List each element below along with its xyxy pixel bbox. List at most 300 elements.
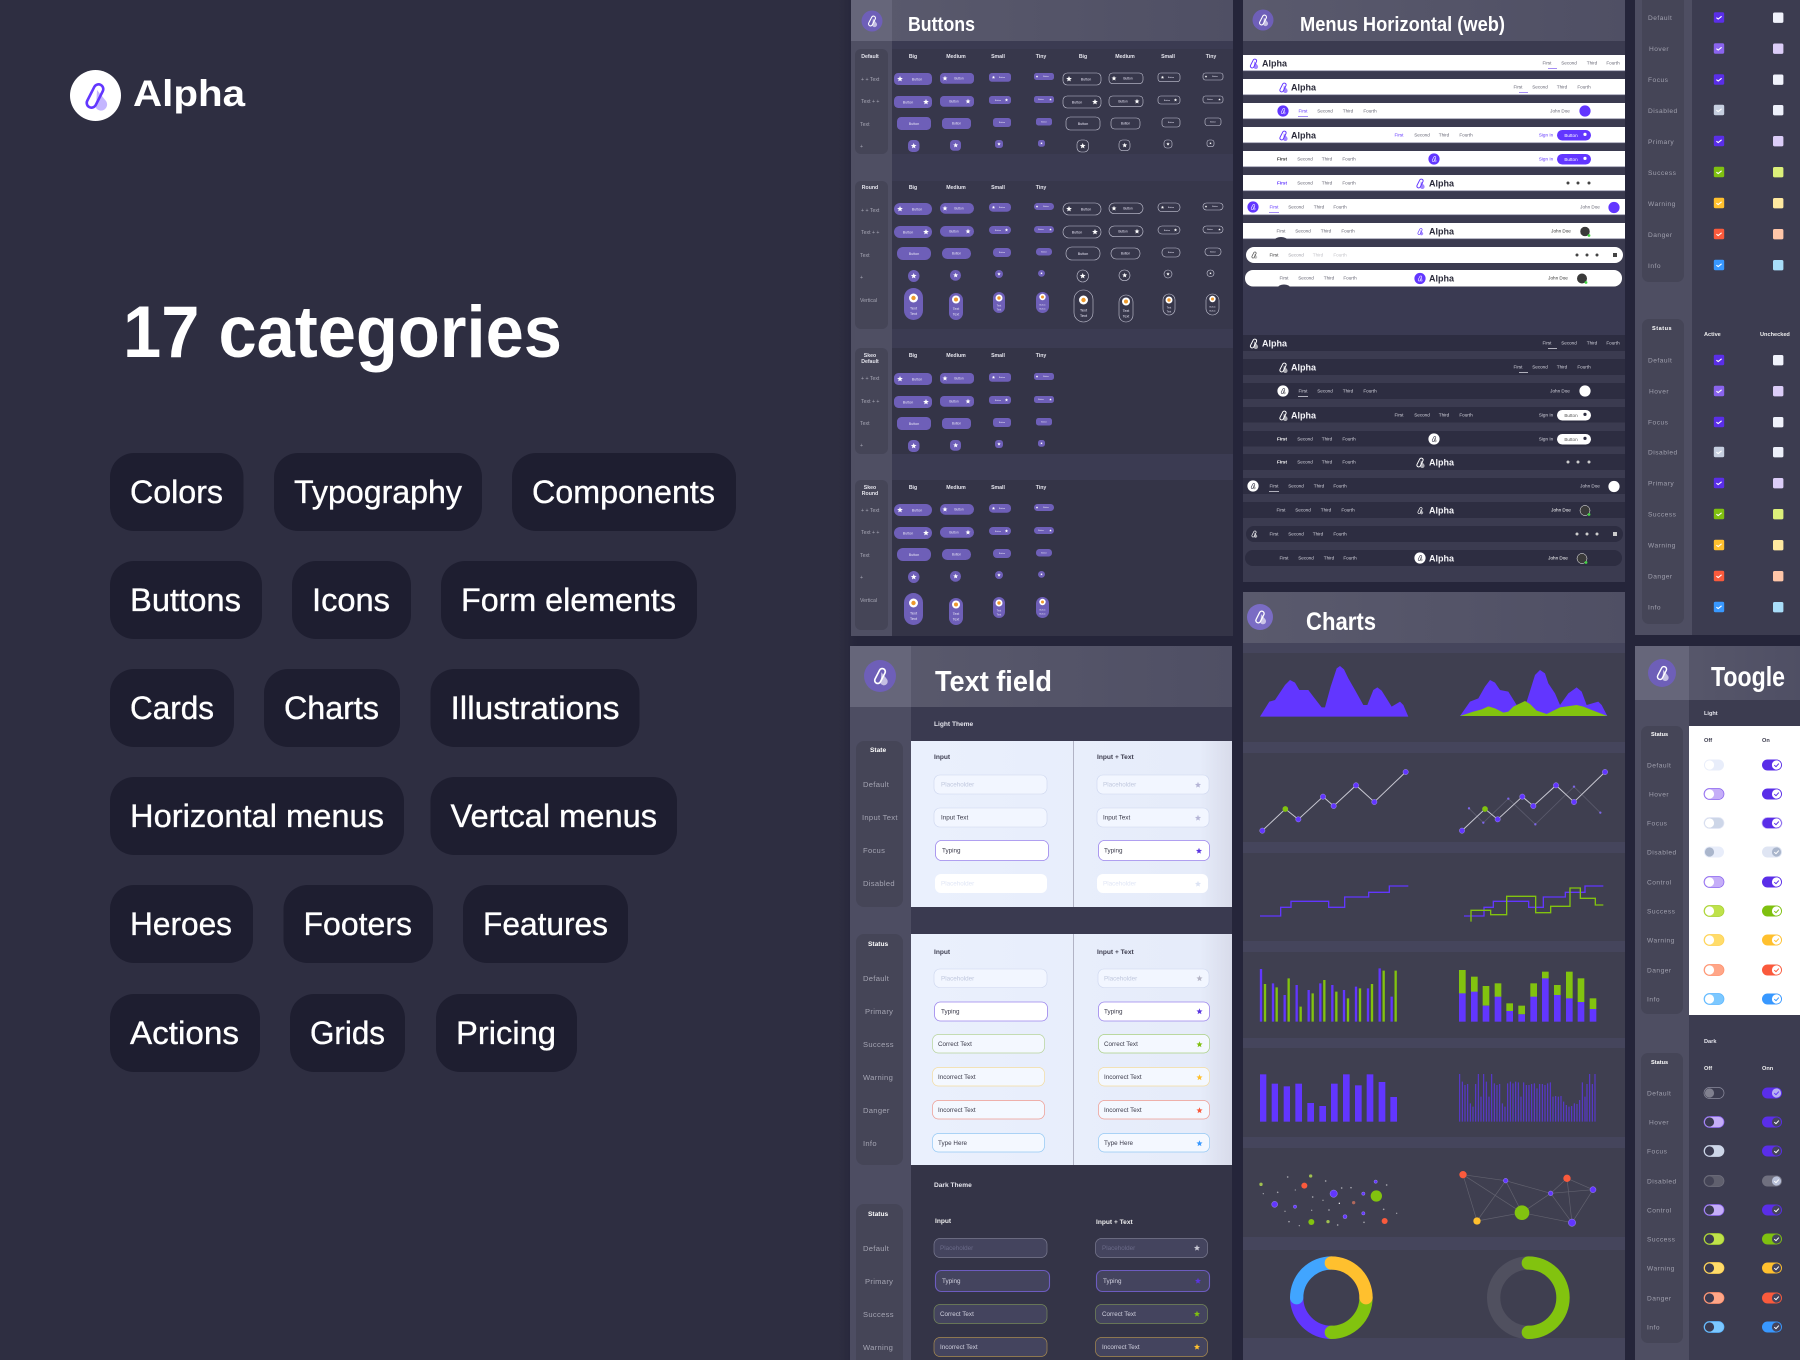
light menu 6: Second (1297, 181, 1313, 186)
light menu 8: Second (1295, 229, 1311, 234)
dark menu 10: Second (1298, 556, 1314, 561)
light form: status: Typing (941, 1008, 960, 1016)
dark form (934, 1218, 1210, 1356)
column headers: Medium (1115, 54, 1135, 60)
chip: Form elements: Form elements (461, 582, 676, 618)
column headers light (1704, 738, 1770, 744)
chip: Grids (290, 994, 405, 1072)
dark menu 6: Fourth (1342, 460, 1356, 465)
light menu 4: First (1395, 133, 1404, 138)
sidebar labels: Focus (863, 846, 885, 855)
dark menu 7: Fourth (1333, 484, 1347, 489)
dark menu 3: John Doe (1550, 389, 1570, 394)
dark menu 10: Third (1324, 556, 1335, 561)
stacked bar chart (1459, 970, 1596, 1022)
light menu 9 (1246, 247, 1623, 263)
white toggle sheet (1689, 726, 1800, 1015)
buttons: default filled: Button (995, 99, 1002, 102)
light menu 4 (1243, 127, 1625, 143)
column headers: Small (991, 185, 1005, 191)
step chart (1260, 886, 1408, 916)
light form: state: Typing (1104, 848, 1123, 854)
sidebar labels (1647, 732, 1677, 1332)
sidebar labels: Disabled (1647, 1178, 1677, 1186)
sidebar labels: Primary (1648, 139, 1674, 146)
chip: Vertcal menus: Vertcal menus (450, 798, 657, 834)
dark menu 1: Alpha (1262, 338, 1288, 349)
light form: status: Type Here (938, 1140, 968, 1147)
panel: buttons (851, 0, 1233, 636)
buttons: round filled (894, 203, 1054, 282)
sidebar labels: Default (863, 780, 890, 789)
column headers: Medium (946, 185, 966, 191)
dark menu 9: First (1270, 532, 1279, 537)
dark menu 8: Third (1321, 508, 1332, 513)
dark menu 8: John Doe (1551, 508, 1571, 513)
dark menu 10: Fourth (1343, 556, 1357, 561)
chip: Buttons: Buttons (130, 582, 241, 618)
column headers: Big (1079, 54, 1087, 60)
category chips (110, 453, 736, 1072)
dark menu 8 (1243, 502, 1625, 518)
sidebar labels: Danger (1647, 1296, 1672, 1302)
dark menu 4: First (1395, 413, 1404, 418)
chip: Vertcal menus (430, 777, 677, 855)
light menu 7: Third (1314, 205, 1325, 210)
sidebar labels: Text + + (861, 399, 879, 405)
sidebar labels: Disabled (1648, 108, 1678, 115)
column headers: Medium (946, 353, 966, 359)
chip: Heroes (110, 885, 253, 963)
sidebar cards (1641, 726, 1683, 1343)
sidebar labels: Text + + (861, 99, 879, 105)
buttons: default filled: Button (912, 78, 922, 82)
brand logo: Alpha (133, 73, 245, 114)
dark menu 6: First (1277, 460, 1287, 465)
sidebar labels: Disabled (1648, 450, 1678, 456)
toggles light off (1704, 760, 1724, 1004)
sidebar labels: Warning (1647, 1266, 1675, 1272)
sidebar labels: Primary (865, 1277, 893, 1286)
sidebar labels: Focus (1647, 1148, 1668, 1156)
light form: status: Input (934, 949, 951, 956)
light menu 4: Fourth (1459, 133, 1473, 138)
dark menu 1: Fourth (1606, 341, 1620, 346)
chip: Typography (274, 453, 482, 531)
light form: status (911, 934, 1232, 1165)
sidebar labels: Info (1648, 604, 1661, 612)
column headers: Tiny (1036, 54, 1046, 60)
column headers: Small (1161, 54, 1175, 60)
panel: charts (1243, 592, 1625, 1360)
light form: status: Incorrect Text (938, 1107, 976, 1114)
sidebar labels: State (870, 747, 886, 754)
sidebar labels: Warning (863, 1343, 893, 1352)
dark menu 4: Second (1414, 413, 1430, 418)
sidebar labels: Round (862, 185, 878, 191)
sidebar labels: Default (1647, 1090, 1671, 1098)
light menu 5: First (1277, 157, 1287, 162)
sidebar labels: Skeo (864, 353, 876, 359)
light menu 2 (1243, 79, 1625, 95)
sidebar labels: Success (863, 1040, 894, 1049)
sidebar labels: Status (868, 941, 888, 948)
donut chart multi-colour (1297, 1263, 1366, 1332)
buttons: round outline (1063, 203, 1223, 282)
toggles light on (1762, 760, 1782, 1004)
light form: status: Placeholder (1104, 976, 1137, 982)
light menu 2: First (1514, 85, 1523, 90)
buttons: default filled: Button (1038, 98, 1044, 101)
light menu 9: Third (1313, 253, 1324, 258)
light menu 1: Alpha (1262, 58, 1288, 69)
light menu 8: John Doe (1551, 229, 1571, 234)
theme label: light: Light Theme (934, 721, 974, 728)
sidebar labels: Success (1648, 170, 1677, 177)
dark menu 9: Second (1288, 532, 1304, 537)
sidebar labels: Danger (1648, 232, 1673, 239)
sidebar labels: Text (860, 421, 870, 427)
light form: state: Placeholder (1103, 782, 1136, 788)
dark menu 1: First (1543, 341, 1552, 346)
buttons: default filled: Button (909, 122, 919, 126)
dark form: Correct Text (940, 1311, 974, 1318)
sidebar labels: Warning (863, 1073, 893, 1082)
light menu 8: Alpha (1429, 226, 1455, 237)
light menu 10 (1245, 270, 1622, 290)
sidebar labels: Text (860, 122, 870, 128)
sidebar labels: Default (861, 359, 879, 365)
dark form: Placeholder (1102, 1245, 1135, 1252)
chip: Illustrations: Illustrations (450, 690, 620, 726)
light menu 2: Fourth (1577, 85, 1591, 90)
sidebar labels: + + Text (861, 376, 880, 382)
dark menu 3: Third (1343, 389, 1354, 394)
buttons: vertical filled: Text (997, 304, 1002, 308)
active checkboxes top (1714, 12, 1724, 270)
sidebar labels (860, 54, 880, 604)
buttons: default filled: Button (1041, 120, 1047, 124)
light menu 9: Second (1288, 253, 1304, 258)
light form: status: Incorrect Text (1104, 1107, 1142, 1114)
light form: status: Input + Text (1097, 949, 1134, 956)
light menu 4: Sign In (1539, 133, 1554, 138)
light menu 3: First (1299, 109, 1308, 114)
area chart (1260, 666, 1408, 717)
light form: status: Incorrect Text (938, 1074, 976, 1081)
sidebar labels: Default (863, 974, 890, 983)
dark form: Incorrect Text (940, 1344, 978, 1351)
unchecked checkboxes bottom (1773, 355, 1783, 612)
sidebar labels: + (860, 275, 863, 281)
dark menu 7 (1243, 478, 1625, 494)
sidebar labels: Info (863, 1139, 877, 1148)
dark menu 8: Alpha (1429, 505, 1455, 516)
light menu 7: John Doe (1580, 205, 1600, 210)
sidebar labels: Vertical (860, 298, 877, 304)
column headers: Tiny (1036, 353, 1046, 359)
panel heading: Toogle (1711, 661, 1785, 692)
light menu 10: Alpha (1429, 273, 1455, 284)
dark menu 2: Third (1557, 365, 1568, 370)
light menu 2: Alpha (1291, 82, 1317, 93)
buttons: vertical filled: Button (1039, 308, 1046, 310)
sidebar labels: + + Text (861, 77, 880, 83)
sidebar labels: Danger (863, 1106, 890, 1115)
theme label: dark: Dark (1704, 1039, 1717, 1045)
light menu 6: Alpha (1429, 178, 1455, 189)
light menu 5: Third (1322, 157, 1333, 162)
light menu 1: Second (1561, 61, 1577, 66)
panel heading: Menus Horizontal (web) (1300, 14, 1505, 36)
sidebar labels: + + Text (861, 508, 880, 514)
chip: Typography: Typography (294, 474, 462, 510)
chip: Heroes: Heroes (130, 906, 232, 942)
chip: Actions (110, 994, 260, 1072)
scatter chart (1259, 1174, 1397, 1226)
toggles dark off (1704, 1088, 1724, 1332)
active checkboxes bottom (1714, 355, 1724, 612)
column headers: Tiny (1036, 185, 1046, 191)
chip: Horizontal menus: Horizontal menus (130, 798, 384, 834)
sidebar labels: + (860, 443, 863, 449)
dark menu 3: First (1299, 389, 1308, 394)
column headers: Medium (946, 54, 966, 60)
chip: Form elements (441, 561, 697, 639)
sidebar labels: Success (863, 1310, 894, 1319)
sidebar labels: Control (1647, 880, 1672, 886)
sidebar labels: Round (862, 491, 878, 497)
sidebar labels: Text (860, 553, 870, 559)
light form: status: Incorrect Text (1104, 1074, 1142, 1081)
dark form: Input (935, 1218, 952, 1225)
light menu 10: Fourth (1343, 276, 1357, 281)
buttons: default filled: Button (952, 122, 961, 126)
light form: status: Correct Text (938, 1041, 972, 1048)
dark menu 5: Sign In (1539, 437, 1554, 442)
light menu 7: First (1270, 205, 1279, 210)
column headers: Small (991, 54, 1005, 60)
buttons: default filled: Button (1043, 75, 1049, 78)
light menu 8 (1243, 223, 1625, 243)
buttons: skeo default (894, 373, 1054, 452)
panel logo (1252, 10, 1274, 30)
light menu 2: Second (1532, 85, 1548, 90)
light menu 10: Third (1324, 276, 1335, 281)
sidebar labels: Info (1647, 996, 1660, 1004)
dark menu 6: Alpha (1429, 457, 1455, 468)
dark menu 4: Button (1564, 413, 1578, 418)
sidebar labels: Focus (1648, 420, 1669, 426)
light menu 6: Fourth (1342, 181, 1356, 186)
dark menu 10: First (1280, 556, 1289, 561)
panel heading: Buttons (908, 14, 975, 36)
sidebar labels (862, 747, 898, 1352)
dark menu 3 (1243, 383, 1625, 399)
light menu 4: Alpha (1291, 130, 1317, 141)
buttons: default filled: Button (949, 100, 959, 104)
panel: toggle (1635, 646, 1800, 1360)
sidebar labels: Status (1652, 326, 1672, 332)
sidebar labels: Default (1648, 358, 1672, 364)
network chart (1459, 1171, 1596, 1226)
column headers: Big (909, 485, 917, 491)
dark menu 2: Alpha (1291, 362, 1317, 373)
buttons: default filled: Button (954, 77, 964, 81)
chip: Footers (284, 885, 433, 963)
dark menu 7: John Doe (1580, 484, 1600, 489)
theme label: light: Light (1704, 711, 1718, 717)
sidebar labels: Status (1651, 1060, 1668, 1066)
dark menu 5: Third (1322, 437, 1333, 442)
sidebar labels: Focus (1647, 820, 1668, 828)
light form: state: Placeholder (941, 782, 974, 788)
sidebar labels: Text + + (861, 230, 879, 236)
buttons: vertical filled: Text (953, 307, 959, 311)
sidebar labels: Warning (1648, 542, 1676, 550)
sidebar labels: Text + + (861, 530, 879, 536)
light form: state (911, 741, 1232, 907)
buttons: default filled: Button (999, 121, 1006, 124)
column headers (909, 54, 1216, 491)
sidebar labels: Info (1648, 263, 1661, 270)
dark menu 8: Second (1295, 508, 1311, 513)
panel: checkboxes (1635, 0, 1800, 635)
buttons: vertical filled: Text (953, 312, 959, 316)
chip: Buttons (110, 561, 262, 639)
light menu 8: Third (1321, 229, 1332, 234)
chip: Features: Features (483, 906, 608, 942)
sidebar labels: Info (1647, 1324, 1660, 1332)
light form: state: Input + Text (1097, 754, 1134, 761)
sidebar labels: Warning (1648, 201, 1676, 208)
light menu 3: John Doe (1550, 109, 1570, 114)
buttons: default filled: Button (903, 100, 913, 104)
column headers: Big (909, 353, 917, 359)
column headers: Small (991, 353, 1005, 359)
light menu 1: Fourth (1606, 61, 1620, 66)
light menu 2: Third (1557, 85, 1568, 90)
chip: Charts (264, 669, 400, 747)
dark menu 3: Second (1317, 389, 1333, 394)
light menu 5: Button (1564, 157, 1578, 162)
buttons: default filled (894, 73, 1054, 152)
sidebar labels: Hover (1649, 46, 1669, 53)
sidebar labels: Disabled (863, 879, 895, 888)
light menu 7: Second (1288, 205, 1304, 210)
dark form: Correct Text (1102, 1311, 1136, 1318)
buttons: vertical filled: Button (1039, 304, 1046, 306)
light menu 6 (1243, 175, 1625, 191)
light menu 4: Third (1439, 133, 1450, 138)
column headers: Tiny (1206, 54, 1216, 60)
dark menu 9: Fourth (1333, 532, 1347, 537)
panel heading: Charts (1306, 608, 1376, 636)
light menu 4: Button (1564, 133, 1578, 138)
column headers light: On (1762, 738, 1770, 744)
dark menu 7: First (1270, 484, 1279, 489)
panel: text field (850, 646, 1232, 1360)
chip: Pricing (436, 994, 577, 1072)
chip: Illustrations (430, 669, 640, 747)
light form: state: Input (934, 754, 951, 761)
chip: Features (463, 885, 628, 963)
light form: state: Typing (942, 848, 961, 854)
light menu 6: First (1277, 181, 1287, 186)
dark menu 5: Fourth (1342, 437, 1356, 442)
light menu 6: Third (1322, 181, 1333, 186)
light menu 5: Sign In (1539, 157, 1554, 162)
column headers: Medium (946, 485, 966, 491)
sidebar labels: Success (1647, 908, 1676, 916)
dark menu 2: Second (1532, 365, 1548, 370)
light menu 3: Third (1343, 109, 1354, 114)
column headers: Tiny (1036, 485, 1046, 491)
column headers: Unchecked (1760, 332, 1790, 338)
panel logo (1648, 659, 1676, 687)
sidebar labels: Disabled (1647, 850, 1677, 856)
sidebar labels: Skeo (864, 485, 876, 491)
buttons: vertical filled (904, 288, 1049, 320)
buttons: default outline (1063, 73, 1223, 152)
line chart (1260, 769, 1408, 833)
light menu 8: First (1277, 229, 1286, 234)
dark menu 6: Second (1297, 460, 1313, 465)
sidebar labels: Hover (1649, 1120, 1669, 1126)
light menu 7 (1243, 199, 1625, 215)
dark menu 5: Button (1564, 437, 1578, 442)
dark menu 1 (1243, 335, 1625, 351)
column headers: Active (1704, 332, 1721, 338)
light menu 5 (1243, 151, 1625, 167)
light menu 10: First (1280, 276, 1289, 281)
sidebar labels: Vertical (860, 598, 877, 604)
sidebar cards (856, 741, 903, 1360)
column headers light: Off (1704, 738, 1712, 744)
light menu 10: Second (1298, 276, 1314, 281)
chip: Actions: Actions (130, 1015, 239, 1051)
column headers dark: Off (1704, 1066, 1712, 1072)
dark menu 4 (1243, 407, 1625, 422)
chip: Components (512, 453, 736, 531)
sidebar labels: Status (868, 1211, 888, 1218)
panel logo (1247, 604, 1273, 630)
light form: state: Placeholder (1103, 880, 1136, 888)
sidebar labels (1648, 15, 1678, 612)
panel logo (864, 660, 896, 692)
light menu 3: Fourth (1363, 109, 1377, 114)
chip: Cards: Cards (130, 690, 214, 726)
sidebar labels: Default (1647, 762, 1671, 770)
sidebar labels: Input Text (862, 813, 898, 822)
chip: Icons (292, 561, 411, 639)
dark menu 7: Second (1288, 484, 1304, 489)
sidebar labels: Danger (1647, 968, 1672, 974)
sidebar labels: Focus (1648, 77, 1669, 84)
buttons: vertical filled: Text (997, 308, 1002, 312)
sidebar labels: Success (1647, 1236, 1676, 1244)
buttons: vertical skeo (904, 593, 1049, 625)
light form: state: Input Text (941, 814, 968, 822)
dark menu 5 (1243, 431, 1625, 446)
sidebar labels: Control (1647, 1208, 1672, 1214)
light menu 10: John Doe (1548, 276, 1568, 281)
light form: status: Typing (1104, 1008, 1123, 1016)
light menu 8: Fourth (1341, 229, 1355, 234)
dark menu 5: Second (1297, 437, 1313, 442)
dark menu 9 (1246, 526, 1623, 542)
column headers: Small (991, 485, 1005, 491)
